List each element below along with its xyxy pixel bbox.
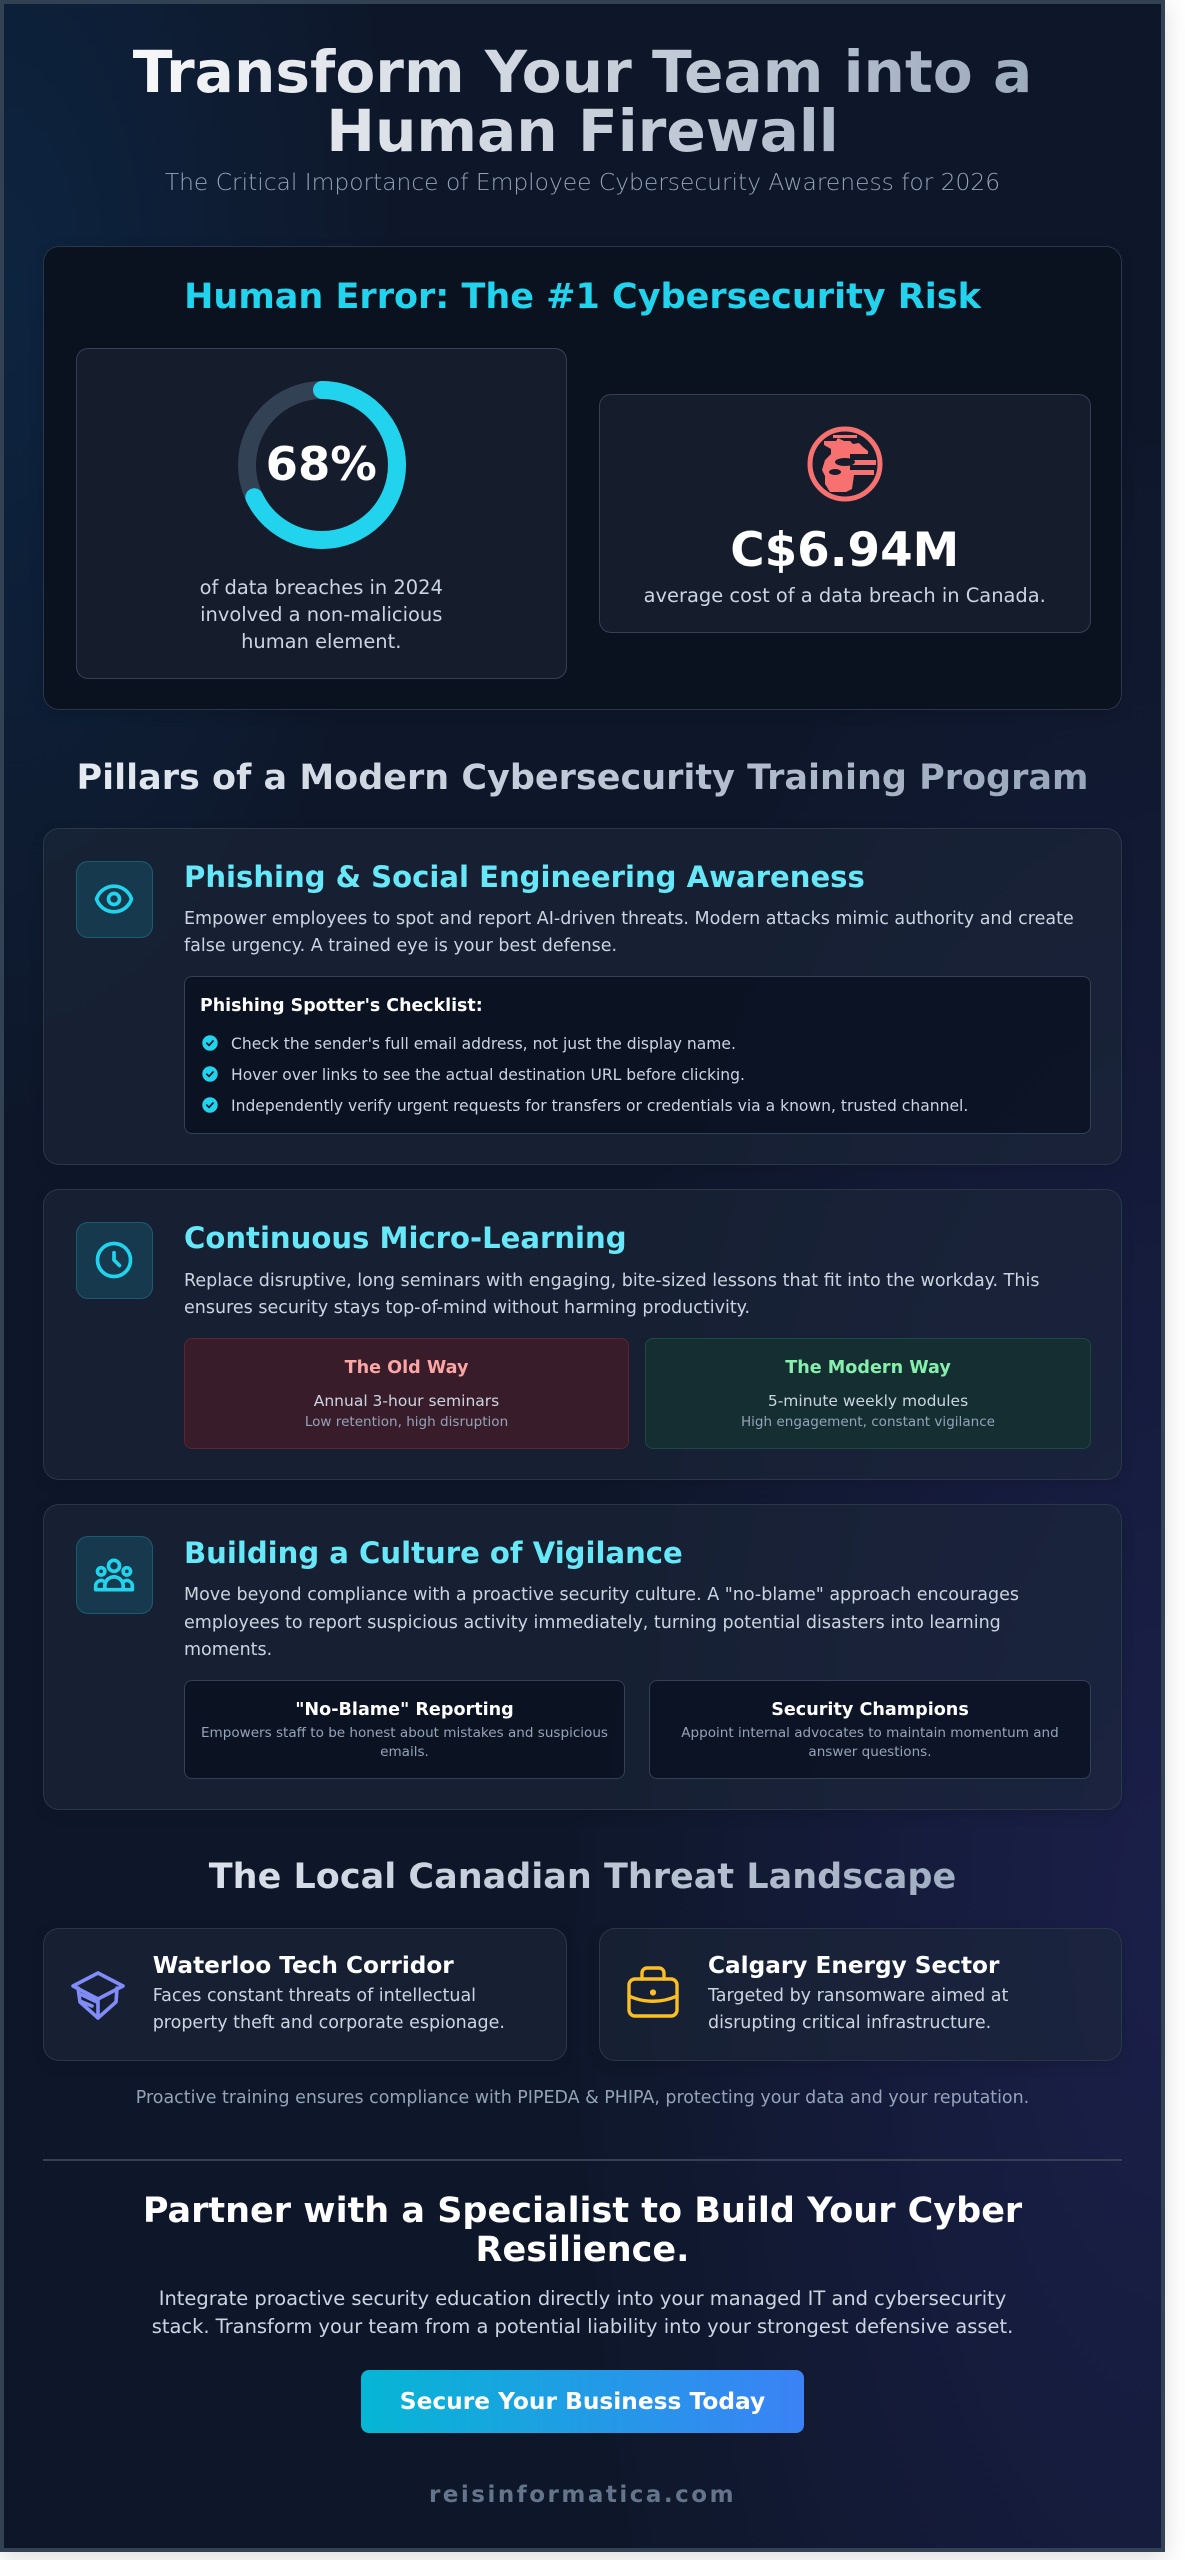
heading: waterloo: Waterloo Tech Corridor [153,1952,454,1979]
subtitle: The Critical Importance of Employee Cybersecurity Awareness for 2026 [165,168,1000,196]
description [184,909,1074,956]
donut chart: 68 percent [238,381,406,549]
box: no-blame reporting [184,1680,625,1779]
icon: clock [76,1222,153,1299]
button [361,2370,804,2433]
title [43,43,1122,160]
description: Replace disruptive, long seminars with engaging, bite-sized lessons that fit into the workday. This [184,1271,1039,1291]
compliance note: Proactive training ensures compliance with PIPEDA & PHIPA, protecting your data and your reputation. [136,2088,1029,2108]
call to action heading: Resilience. [476,2230,689,2270]
button: Secure Your Business Today [400,2388,765,2415]
old way note: Low retention, high disruption [305,1414,508,1430]
description: disrupting critical infrastructure. [708,2013,991,2033]
box text [201,1724,608,1760]
description: Targeted by ransomware aimed at [708,1986,1008,2006]
stat description [200,576,443,652]
description [153,1986,505,2033]
heading: canadian threat landscape [43,1855,1122,1899]
box title: Security Champions [771,1700,969,1720]
website: reisinformatica.com [429,2482,736,2508]
panel: micro-learning [43,1189,1122,1480]
heading: micro-learning: Continuous Micro-Learning [184,1221,627,1255]
description [184,1271,1039,1318]
stat value: 68%: 68% [266,437,377,491]
icon: briefcase [627,1966,679,2018]
check icon 1 [202,1035,218,1051]
icon: team [76,1536,153,1614]
description [184,1585,1019,1660]
panel: culture of vigilance [43,1504,1122,1810]
description: false urgency. A trained eye is your best defense. [184,936,617,956]
comparison: modern way [645,1338,1091,1448]
modern way title: The Modern Way [785,1358,951,1378]
call to action text: Integrate proactive security education directly into your managed IT and cybersecurity [159,2287,1006,2310]
checklist item 2: Hover over links to see the actual destination URL before clicking. [231,1066,745,1084]
description: Faces constant threats of intellectual [153,1986,476,2006]
call to action text: stack. Transform your team from a potential liability into your strongest defensive asset. [152,2315,1013,2338]
checklist item 1: Check the sender's full email address, not just the display name. [231,1034,736,1052]
panel: human error risk [43,246,1122,710]
heading: culture: Building a Culture of Vigilance [184,1536,683,1570]
box title: "No-Blame" Reporting [295,1700,514,1720]
icon: eye [76,860,153,938]
icon: money circle [808,426,882,502]
modern way note: High engagement, constant vigilance [741,1414,995,1430]
box text: Appoint internal advocates to maintain momentum and [681,1724,1059,1740]
call to action heading [143,2191,1022,2270]
heading: human error: Human Error: The #1 Cybersecurity Risk [184,276,981,316]
checklist title: Phishing Spotter's Checklist: [200,996,483,1016]
panel: calgary [599,1928,1122,2061]
description: Empower employees to spot and report AI-driven threats. Modern attacks mimic authority and create [184,909,1074,929]
check icon 2 [202,1066,218,1082]
box text: Empowers staff to be honest about mistakes and suspicious [201,1724,608,1740]
box text: emails. [380,1744,429,1760]
box: security champions [649,1680,1091,1779]
box text [681,1724,1059,1760]
stat description: average cost of a data breach in Canada. [644,584,1046,607]
old way main line: Annual 3-hour seminars [314,1392,499,1410]
check icon 3 [202,1097,218,1113]
title: Transform Your Team into a [133,38,1032,106]
heading: canadian threat landscape: The Local Canadian Threat Landscape [209,1857,956,1897]
description: moments. [184,1640,272,1660]
description: employees to report suspicious activity immediately, turning potential disasters into learning [184,1612,1001,1632]
stat description: of data breaches in 2024 [200,576,443,598]
checklist item 3: Independently verify urgent requests for transfers or credentials via a known, trusted channel. [231,1096,968,1114]
heading: phishing: Phishing & Social Engineering Awareness [184,860,865,894]
box text: answer questions. [808,1744,932,1760]
panel: waterloo [43,1928,567,2061]
old way title: The Old Way [345,1358,468,1378]
call to action text [152,2287,1013,2338]
stat card: 68 percent [76,348,567,679]
icon: cube [71,1971,125,2020]
panel: phishing awareness [43,828,1122,1165]
stat description: human element. [241,630,401,652]
stat value: cost: C$6.94M [730,524,959,578]
modern way main line: 5-minute weekly modules [768,1392,968,1410]
stat card: breach cost [598,394,1091,633]
description [708,1986,1008,2033]
comparison: old way [184,1338,629,1448]
heading: pillars: Pillars of a Modern Cybersecurity Training Program [77,758,1088,798]
description: property theft and corporate espionage. [153,2013,505,2033]
checklist box [184,976,1091,1134]
description: ensures security stays top-of-mind without harming productivity. [184,1298,750,1318]
title: Human Firewall [326,96,839,164]
stat description: involved a non-malicious [200,602,442,626]
heading: calgary: Calgary Energy Sector [708,1952,999,1979]
call to action heading: Partner with a Specialist to Build Your Cyber [143,2191,1022,2231]
description: Move beyond compliance with a proactive security culture. A "no-blame" approach encourages [184,1585,1019,1605]
